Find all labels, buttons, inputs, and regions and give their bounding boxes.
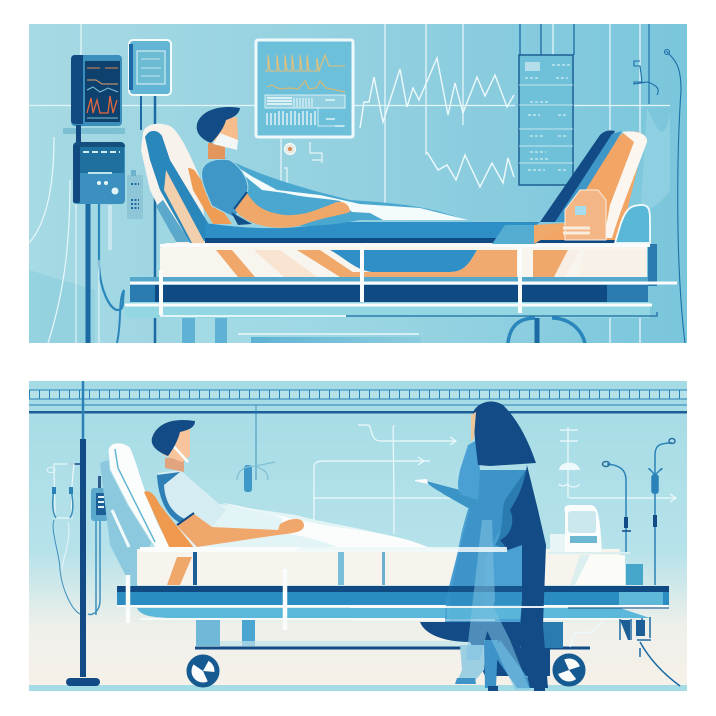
shelf under monitor <box>63 128 125 134</box>
IV pole and cables <box>29 95 155 343</box>
trailing dark coat <box>420 622 563 676</box>
IV drip on rail <box>237 405 275 492</box>
legs <box>457 645 486 682</box>
long hair trailing <box>500 465 548 688</box>
monitor: upper small display <box>129 40 171 95</box>
bed: mattress side stripes <box>160 243 647 277</box>
bed bands seen through gown <box>447 586 525 592</box>
reaching arm <box>426 481 480 508</box>
IV drip bag and tube <box>47 464 80 614</box>
blanket over legs <box>225 158 465 226</box>
hair <box>152 420 195 456</box>
panel: bottom scene, nurse with patient <box>29 381 687 691</box>
nurse <box>296 401 563 691</box>
hair <box>197 107 240 143</box>
bed: rail over patient <box>140 547 300 552</box>
patient <box>144 420 430 549</box>
bed rail across nurse <box>296 547 507 552</box>
under-arm shadow <box>231 212 252 225</box>
blanket <box>170 500 425 548</box>
panel: top scene, patient with monitors <box>29 24 687 343</box>
IV stands on right <box>602 438 675 585</box>
infusion pump <box>73 142 125 204</box>
small infusion device <box>127 170 143 219</box>
orange upper arm on seat <box>144 491 195 549</box>
bed: head end, white frame <box>141 124 232 243</box>
coat-rack lamp on wall <box>559 462 580 470</box>
bed: wheel stand <box>508 318 585 343</box>
face <box>163 427 190 462</box>
arm <box>235 193 350 228</box>
background grid lines <box>29 24 670 343</box>
patient <box>197 107 468 228</box>
bed: base bands <box>117 569 669 630</box>
veil <box>473 401 536 466</box>
machine on side table <box>548 505 630 553</box>
bed: undercarriage and wheels <box>189 617 680 686</box>
bed: side panel and posts <box>137 549 625 585</box>
waveform: upper ECG line <box>360 58 514 128</box>
mask <box>213 133 238 150</box>
data panel on wall <box>519 55 573 185</box>
neck <box>165 458 184 472</box>
bed: head rest <box>100 443 173 590</box>
gown <box>445 470 537 622</box>
IV tube hooks on right <box>634 24 685 343</box>
wall socket and outlet fittings <box>281 137 322 187</box>
light drape streaks <box>466 520 530 690</box>
face <box>213 117 238 148</box>
shirt <box>158 470 226 530</box>
sleeve band <box>234 192 247 209</box>
waveform: lower ECG line <box>427 152 514 187</box>
arm <box>177 514 304 547</box>
monitor: vital signs tower <box>71 55 122 126</box>
IV pole left <box>66 381 100 686</box>
monitor: large wall display <box>256 40 353 137</box>
sleeve <box>458 440 480 500</box>
torso shirt <box>202 159 248 218</box>
oxygen strap <box>167 439 188 462</box>
neck <box>208 143 225 159</box>
background wall fittings <box>314 425 676 534</box>
bed: foot board <box>492 130 650 245</box>
sleeve band <box>177 513 194 525</box>
infusion pump on pole <box>88 476 108 615</box>
bed: base bands and rails <box>125 244 677 334</box>
ceiling rail <box>29 390 687 414</box>
bed: mattress blue <box>205 222 615 243</box>
